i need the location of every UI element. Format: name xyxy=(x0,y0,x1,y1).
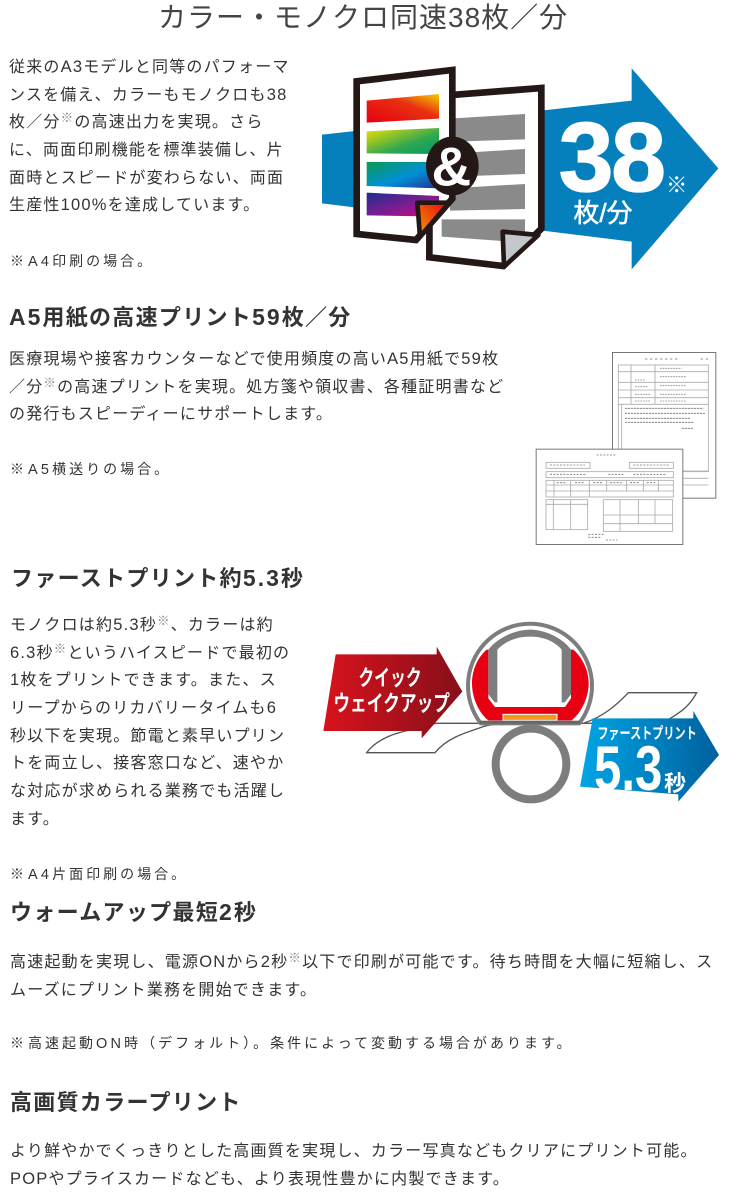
blue arrow: first print 5.3 seconds: 秒 xyxy=(664,771,686,796)
text block: 38 pages description: に、両面印刷機能を標準装備し、片 xyxy=(9,142,284,159)
footnote: A4 single-sided: ※ A4片面印刷の場合。 xyxy=(10,866,188,883)
text block: 38 pages description xyxy=(9,58,290,214)
text block: first print description: 1枚をプリントできます。また、ス xyxy=(10,671,277,689)
text block: A5 description: ／分※の高速プリントを実現。処方箋や領収書、各種証明書など xyxy=(9,376,504,396)
text block: first print description: ます。 xyxy=(10,811,60,828)
prescription form xyxy=(612,352,716,498)
text block: high quality description: POPやプライスカードなども、より表現性豊かに内製できます。 xyxy=(10,1170,510,1188)
text block: first print description: 秒以下を実現。節電と素早いプリン xyxy=(10,728,285,745)
text block: warm-up description xyxy=(10,951,713,999)
red arrow: quick wake-up: ウェイクアップ xyxy=(333,691,450,716)
text block: 38 pages description: 枚／分※の高速出力を実現。さら xyxy=(9,111,264,131)
heading: first print: ファーストプリント約5.3秒 xyxy=(11,565,304,591)
graphic: sample forms xyxy=(536,352,716,545)
blue arrow xyxy=(322,68,718,269)
blue arrow: first print 5.3 seconds: 5.3 xyxy=(594,734,662,804)
text block: first print description: リープからのリカバリータイムも6 xyxy=(10,699,277,717)
receipt form xyxy=(536,449,683,544)
text block: first print description: モノクロは約5.3秒※、カラーは約 xyxy=(10,614,274,634)
text block: first print description: 6.3秒※というハイスピードで最初の xyxy=(10,642,290,662)
colour page xyxy=(357,70,452,240)
footnote: quick start: ※ 高速起動ON時（デフォルト）。条件によって変動する場合があります。 xyxy=(10,1033,574,1053)
blue arrow: first print 5.3 seconds xyxy=(580,711,719,804)
paper sheet xyxy=(367,693,697,753)
heading: high quality colour: 高画質カラープリント xyxy=(10,1090,242,1115)
monochrome page xyxy=(429,88,541,267)
text block: warm-up description: 高速起動を実現し、電源ONから2秒※以下で印刷が可能です。待ち時間を大幅に短縮し、ス xyxy=(10,951,713,971)
red arrow: quick wake-up: クイック xyxy=(358,666,422,691)
text block: 38 pages description: 生産性100%を達成しています。 xyxy=(9,196,260,214)
text block: high quality description xyxy=(10,1142,698,1188)
text block: A5 description: の発行もスピーディーにサポートします。 xyxy=(9,406,333,423)
fuser unit xyxy=(468,624,592,724)
title: カラー・モノクロ同速38枚／分 xyxy=(158,2,568,33)
text block: first print description xyxy=(10,614,290,828)
text block: warm-up description: ムーズにプリント業務を開始できます。 xyxy=(10,982,317,999)
reference mark: ※ xyxy=(666,174,687,198)
graphic: quick wake-up fuser diagram xyxy=(323,622,719,804)
heading: A5: A5用紙の高速プリント59枚／分 xyxy=(9,304,352,330)
red arrow: quick wake-up xyxy=(323,647,462,738)
text block: first print description: な対応が求められる業務でも活躍し xyxy=(10,783,285,800)
graphic: 38 pages per minute arrow xyxy=(322,66,718,270)
text block: 38 pages description: ンスを備え、カラーもモノクロも38 xyxy=(9,86,287,104)
text block: high quality description: より鮮やかでくっきりとした高画質を実現し、カラー写真などもクリアにプリント可能。 xyxy=(10,1143,698,1160)
text block: 38 pages description: 従来のA3モデルと同等のパフォーマ xyxy=(9,58,290,76)
number 38: 38 xyxy=(559,102,666,212)
heading: warm-up: ウォームアップ最短2秒 xyxy=(10,899,257,925)
text block: A5 description: 医療現場や接客カウンターなどで使用頻度の高いA5用紙で59枚 xyxy=(9,350,499,368)
pressure roller xyxy=(496,729,566,799)
footnote: A5: ※ A5横送りの場合。 xyxy=(10,461,171,478)
text block: A5 description xyxy=(9,350,504,423)
text block: 38 pages description: 面時とスピードが変わらない、両面 xyxy=(9,170,284,187)
ampersand badge: & xyxy=(431,135,471,197)
unit label: 枚/分 xyxy=(573,198,633,228)
text block: first print description: トを両立し、接客窓口など、速やか xyxy=(10,755,284,772)
footnote: A4: ※ A4印刷の場合。 xyxy=(10,253,154,270)
